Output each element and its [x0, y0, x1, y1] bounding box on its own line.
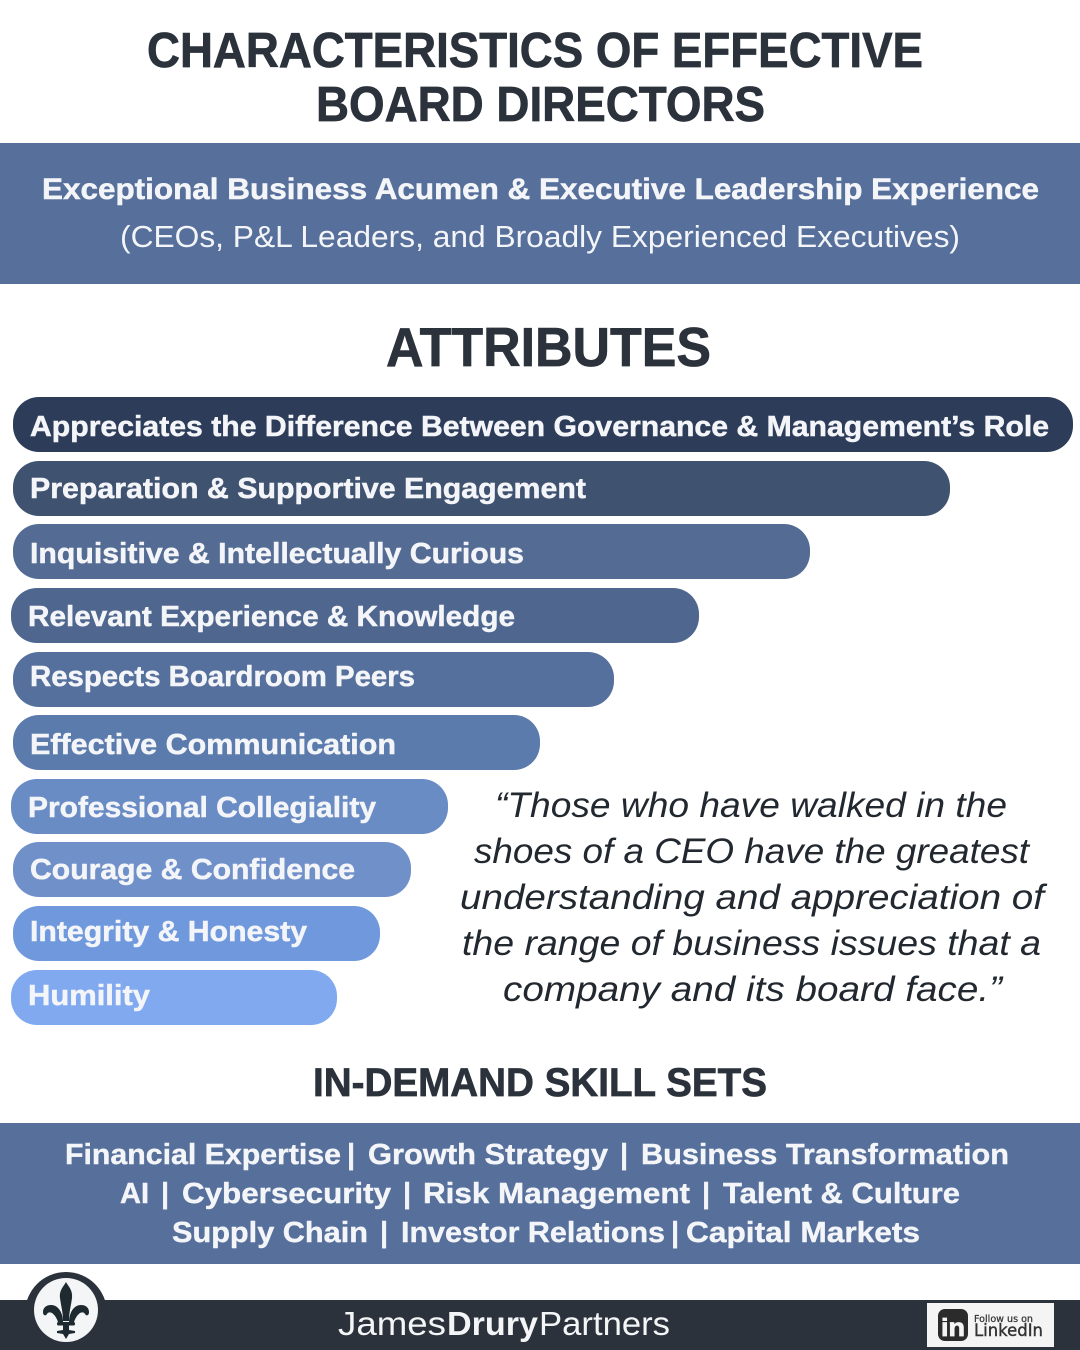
title: CHARACTERISTICS OF EFFECTIVE: [147, 24, 923, 78]
bar: integrity: [13, 906, 380, 961]
quote: company and its board face.”: [503, 970, 1003, 1009]
bar chart: attributes: [11, 397, 1073, 1025]
icon: follow us on LinkedIn badge: [927, 1303, 1054, 1347]
panel: skill sets band: |: [671, 1217, 679, 1249]
quote: the range of business issues that a: [462, 924, 1041, 963]
bar: governance and management: [13, 397, 1073, 452]
quote: “Those who have walked in the: [495, 786, 1007, 825]
bar: inquisitive: Inquisitive & Intellectually Curious: [30, 538, 524, 570]
bar: professional collegiality: Professional Collegiality: [28, 792, 376, 824]
bar: integrity: Integrity & Honesty: [30, 916, 307, 948]
panel: skill sets band: Risk Management: [423, 1178, 690, 1210]
panel: skill sets band: [0, 1123, 1080, 1264]
panel: skill sets band: |: [403, 1178, 411, 1210]
bar: professional collegiality: [11, 779, 448, 834]
bar: preparation: [13, 461, 950, 516]
footer bar: [0, 1300, 1080, 1350]
panel: skill sets band: Capital Markets: [686, 1217, 920, 1249]
icon: fleur-de-lis logo: [25, 1272, 107, 1350]
bar: respects peers: [13, 652, 614, 707]
panel: executive leadership band: (CEOs, P&L Leaders, and Broadly Experienced Executives): [120, 219, 960, 254]
panel: skill sets band: |: [702, 1178, 710, 1210]
panel: executive leadership band: [0, 143, 1080, 284]
title: [147, 24, 923, 132]
panel: skill sets band: |: [347, 1139, 355, 1171]
panel: skill sets band: Talent & Culture: [723, 1178, 960, 1210]
panel: skill sets band: AI: [120, 1178, 149, 1210]
panel: skill sets band: |: [380, 1217, 388, 1249]
panel: skill sets band: Investor Relations: [401, 1217, 665, 1249]
bar: effective communication: [13, 715, 540, 770]
bar: governance and management: Appreciates the Difference Between Governance & Management’s Role: [30, 411, 1049, 443]
bar: relevant experience: [11, 588, 699, 643]
quote: [460, 786, 1048, 1009]
panel: skill sets band: Financial Expertise: [65, 1139, 341, 1171]
heading: in-demand skill sets: IN-DEMAND SKILL SETS: [313, 1061, 767, 1105]
bar: inquisitive: [13, 524, 810, 579]
panel: skill sets band: Cybersecurity: [182, 1178, 391, 1210]
footer brand name: [338, 1305, 670, 1342]
panel: executive leadership band: Exceptional Business Acumen & Executive Leadership Experience: [42, 173, 1039, 206]
bar: preparation: Preparation & Supportive Engagement: [30, 473, 586, 505]
footer brand name: Drury: [447, 1305, 539, 1342]
footer brand name: James: [338, 1305, 446, 1342]
panel: skill sets band: |: [620, 1139, 628, 1171]
footer brand name: Partners: [539, 1305, 670, 1342]
icon: follow us on LinkedIn badge: LinkedIn: [974, 1321, 1043, 1341]
heading: attributes: ATTRIBUTES: [386, 316, 711, 378]
bar: relevant experience: Relevant Experience & Knowledge: [28, 601, 515, 633]
quote: understanding and appreciation of: [460, 878, 1048, 917]
bar: respects peers: Respects Boardroom Peers: [30, 661, 415, 693]
icon: follow us on LinkedIn badge: in: [941, 1314, 965, 1342]
panel: skill sets band: |: [161, 1178, 169, 1210]
bar: humility: [11, 970, 337, 1025]
bar: courage: Courage & Confidence: [30, 854, 355, 886]
quote: shoes of a CEO have the greatest: [474, 832, 1030, 871]
title: BOARD DIRECTORS: [316, 78, 765, 132]
panel: skill sets band: Supply Chain: [172, 1217, 368, 1249]
panel: skill sets band: Business Transformation: [641, 1139, 1009, 1171]
bar: effective communication: Effective Communication: [30, 729, 396, 761]
panel: skill sets band: Growth Strategy: [368, 1139, 608, 1171]
bar: humility: Humility: [28, 980, 150, 1012]
icon: follow us on LinkedIn badge: Follow us on: [974, 1314, 1033, 1325]
bar: courage: [13, 842, 411, 897]
